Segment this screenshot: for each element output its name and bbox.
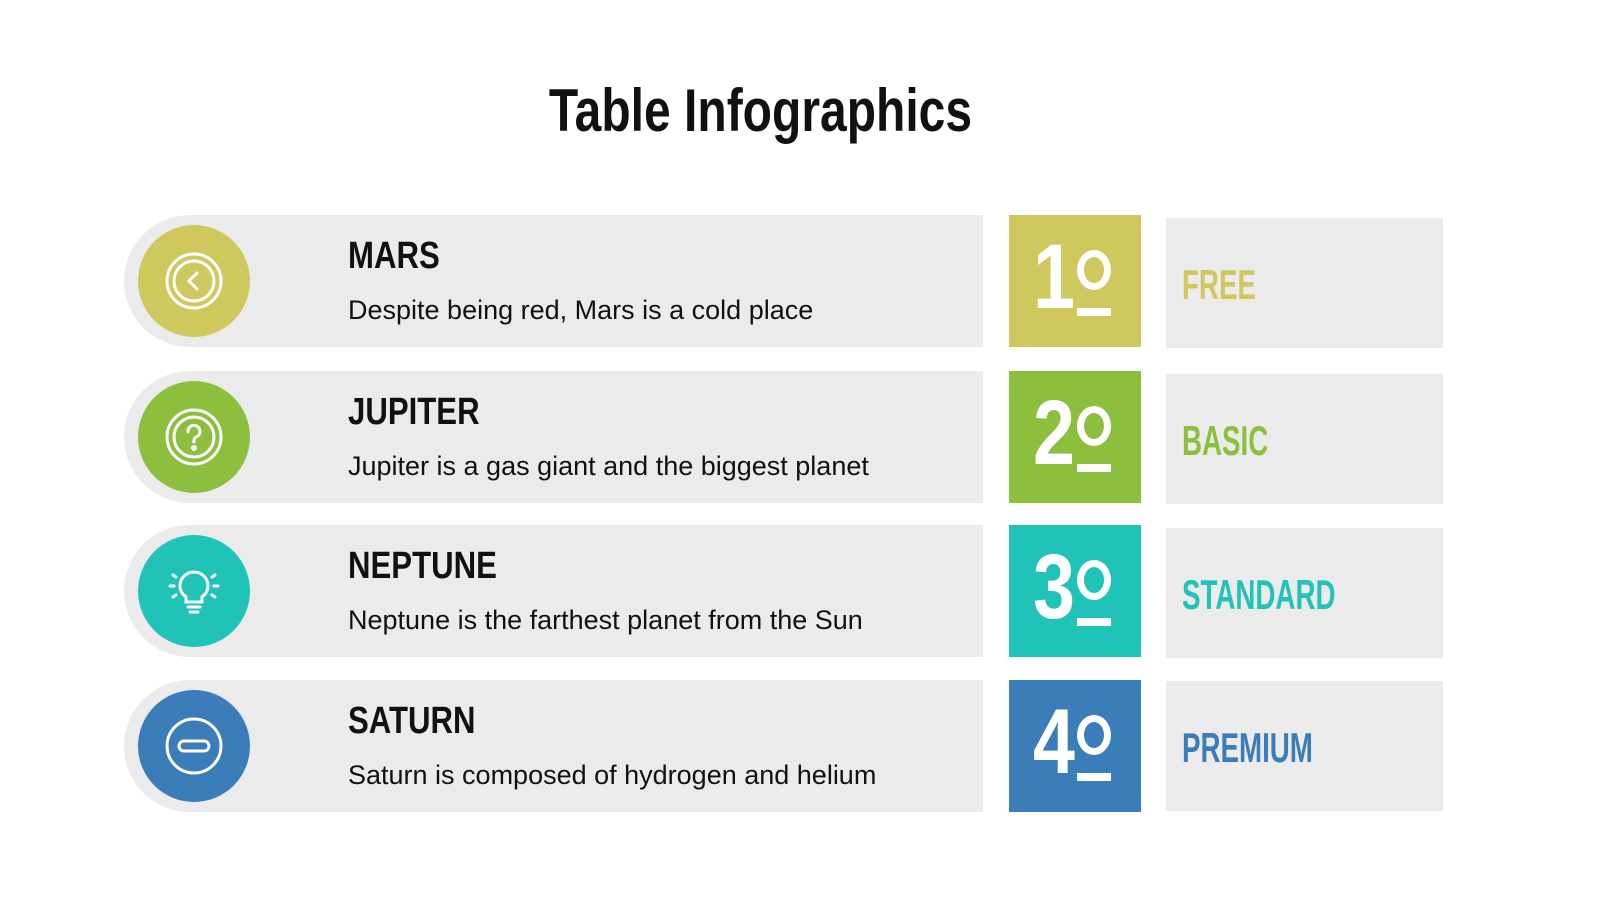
number 4 [1009,680,1141,812]
number 2: 2 [1033,382,1075,484]
icon: bulb [138,535,250,647]
number 3: 3 [1033,536,1075,638]
heading: Mars: MARS [348,235,440,277]
pill: Mars [124,215,983,347]
heading: Neptune: NEPTUNE [348,545,497,587]
number 4: 4 [1033,691,1075,793]
row: Saturn [124,680,1443,812]
label: free [1166,218,1443,348]
number 1: 1 [1033,226,1075,328]
label: basic [1166,374,1443,504]
number 1 [1009,215,1141,347]
label: free: FREE [1182,261,1256,308]
text: Neptune: Neptune is the farthest planet from the Sun [348,605,863,635]
text: Mars: Despite being red, Mars is a cold place [348,295,813,325]
label: standard [1166,528,1443,658]
heading: Jupiter: JUPITER [348,391,480,433]
text: Jupiter: Jupiter is a gas giant and the biggest planet [348,451,869,481]
row: Mars [124,215,1443,348]
number 3 [1009,525,1141,657]
label: basic: BASIC [1182,417,1268,464]
label: standard: STANDARD [1182,571,1335,618]
pill: Jupiter [124,371,983,503]
number 2 [1009,371,1141,503]
text: Saturn: Saturn is composed of hydrogen and helium [348,760,876,790]
icon: minus [138,690,250,802]
label: premium: PREMIUM [1182,724,1313,771]
icon: clock [138,225,250,337]
label: premium [1166,681,1443,811]
heading: Saturn: SATURN [348,700,476,742]
row: Neptune [124,525,1443,658]
pill: Neptune [124,525,983,657]
pill: Saturn [124,680,983,812]
title: Table Infographics [548,77,972,144]
icon: question [138,381,250,493]
row: Jupiter [124,371,1443,504]
